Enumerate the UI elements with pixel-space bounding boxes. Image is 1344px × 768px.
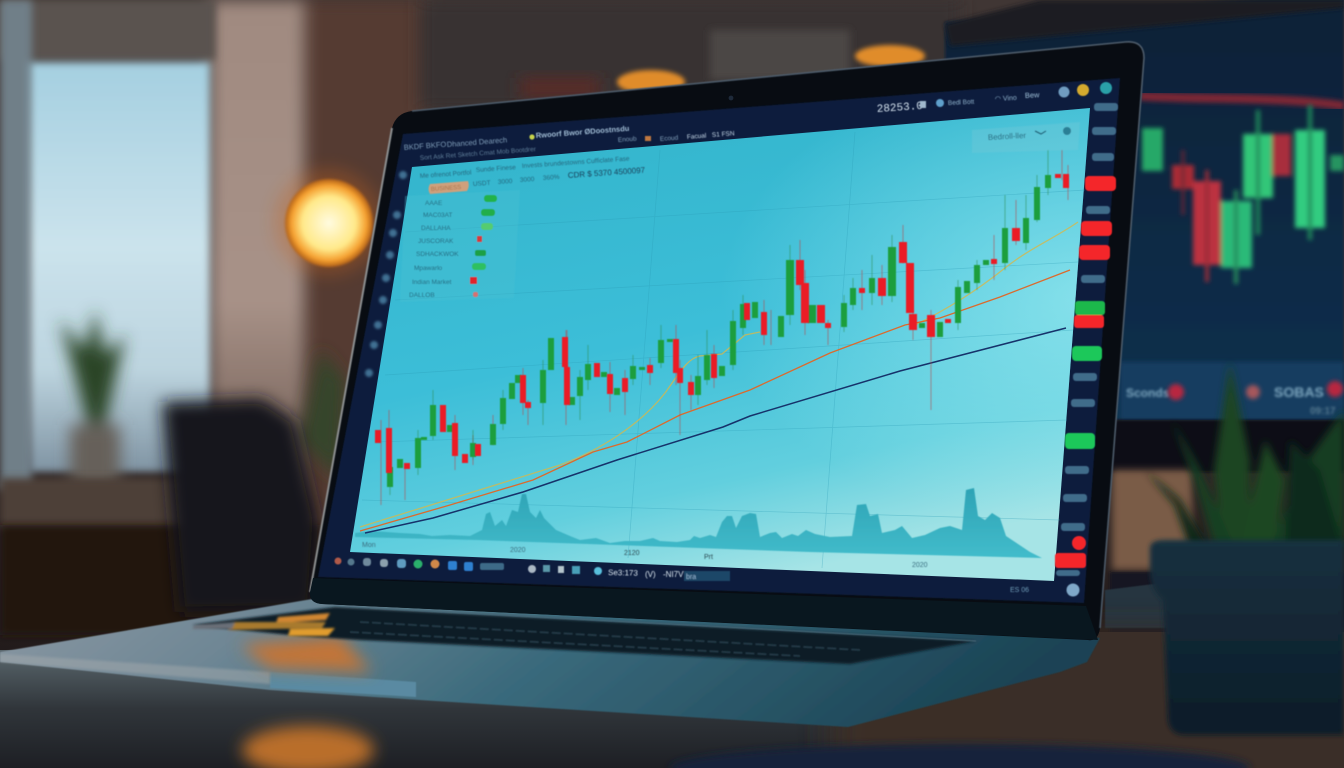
watchlist panel: Mpawarlo: [414, 265, 443, 272]
watchlist panel: MAC03AT: [423, 212, 453, 219]
blurred background plant: [60, 310, 345, 490]
desk dark shadow: [670, 744, 1250, 768]
monitor moving-average line: [1140, 96, 1344, 106]
x axis labels: [362, 542, 928, 569]
top menu bar: [403, 124, 735, 162]
round glowing lamp: [274, 168, 382, 276]
top-right status bar: Bew: [1025, 90, 1040, 100]
monitor footer labels: Sconds: [1126, 386, 1170, 400]
laptop base: [0, 599, 1100, 727]
top-right status bar: Bedl Bott: [948, 99, 975, 107]
top menu bar: Rwoorf Bwor ØDoostnsdu: [535, 124, 630, 140]
foreground plant pot: [1150, 540, 1344, 735]
lid grey edge: [412, 42, 1144, 628]
top menu bar: Dhanced Dearech: [446, 135, 507, 149]
top-right status bar: 28253.0: [876, 101, 923, 116]
bottom taskbar: Se3:173: [608, 568, 639, 578]
watchlist panel: Me ofrenot Portfol: [420, 169, 472, 180]
side table and floor: [0, 478, 320, 635]
chart toolbar dropdown: [972, 122, 1080, 153]
top menu bar: Sort Ask Ret Sketch Cmat Mob Bootdrer: [420, 146, 537, 162]
watchlist panel: Invests brundestowns Cufficlate Fase: [522, 155, 630, 170]
moving average yellow: [360, 222, 1078, 527]
monitor footer labels: [1126, 384, 1336, 417]
volume histogram: [355, 488, 1042, 558]
orange light on base: [240, 636, 372, 672]
watchlist panel: 3000: [498, 178, 513, 186]
watchlist panel: [400, 155, 646, 302]
monitor footer labels: 09:17: [1310, 406, 1336, 417]
lid chin: [310, 578, 1098, 640]
red candles: [378, 174, 1066, 473]
bottom taskbar: [334, 558, 1080, 596]
desk surface: [0, 632, 1344, 768]
laptop lid: [310, 42, 1144, 640]
top menu bar: S1 FSN: [712, 130, 735, 139]
left sidebar icons: [365, 171, 407, 377]
watchlist panel: DALLAHA: [421, 225, 451, 232]
moving average orange: [360, 270, 1070, 531]
watchlist panel: CDR $ 5370 4500097: [568, 166, 646, 180]
candle wicks: [381, 150, 1068, 505]
blurred room: window, curtain, wall: [0, 0, 960, 640]
keyboard: [192, 607, 976, 664]
webcam: [729, 96, 733, 100]
monitor footer band: [1120, 362, 1344, 420]
foreground plant leaves: [1145, 362, 1344, 550]
office chair: [162, 398, 318, 612]
desk orange reflection: [242, 726, 374, 768]
top menu bar: Enoub: [618, 136, 637, 144]
background sideboard right: [1105, 420, 1344, 638]
x axis labels: 2020: [912, 562, 928, 569]
background monitor with chart: [945, 0, 1344, 420]
watchlist panel: Sunde Finese: [476, 164, 517, 174]
orange-lit keys: [192, 613, 335, 636]
top menu bar: BKDF BKFO: [403, 140, 447, 152]
x axis labels: Mon: [362, 542, 376, 549]
pendant lamps: [617, 45, 925, 94]
watchlist panel: AAAE: [425, 200, 443, 207]
watchlist panel: Indian Market: [412, 279, 452, 286]
right sidebar price tags: [1055, 103, 1118, 576]
monitor candles: [1142, 105, 1344, 284]
watchlist panel: SDHACKWOK: [416, 251, 459, 258]
watchlist panel: DALLOB: [409, 292, 435, 299]
x axis labels: 2020: [510, 547, 526, 554]
x axis labels: Prt: [704, 554, 713, 561]
watchlist panel: 3000: [520, 176, 535, 184]
bottom taskbar: -NI7V: [663, 570, 684, 579]
top-right status bar: ◠ Vino: [995, 95, 1017, 103]
base front edge highlight: [270, 672, 416, 697]
monitor footer labels: SOBAS: [1274, 384, 1324, 400]
x axis labels: 2120: [624, 550, 640, 557]
watchlist panel: JUSCORAK: [418, 238, 454, 245]
green candles: [390, 175, 1048, 487]
watchlist panel: BUSINESS: [431, 185, 461, 193]
chart toolbar dropdown: Bedroll-ller: [988, 131, 1027, 142]
top menu bar: Ecoud: [660, 135, 679, 143]
screen frame navy: [318, 78, 1120, 603]
top-right status bar: [876, 82, 1112, 116]
bottom taskbar: bra: [686, 574, 696, 581]
watchlist panel: 360%: [543, 174, 560, 182]
bottom taskbar: ES 06: [1010, 587, 1029, 594]
watchlist panel: USDT: [473, 180, 491, 188]
chart panel: [350, 108, 1090, 581]
watchlist pill orange: [428, 181, 469, 194]
bottom taskbar: (V): [645, 570, 656, 579]
laptop: [0, 42, 1144, 727]
grid lines: [362, 132, 1085, 568]
top menu bar: Facual: [687, 132, 707, 141]
moving average navy: [365, 328, 1066, 533]
